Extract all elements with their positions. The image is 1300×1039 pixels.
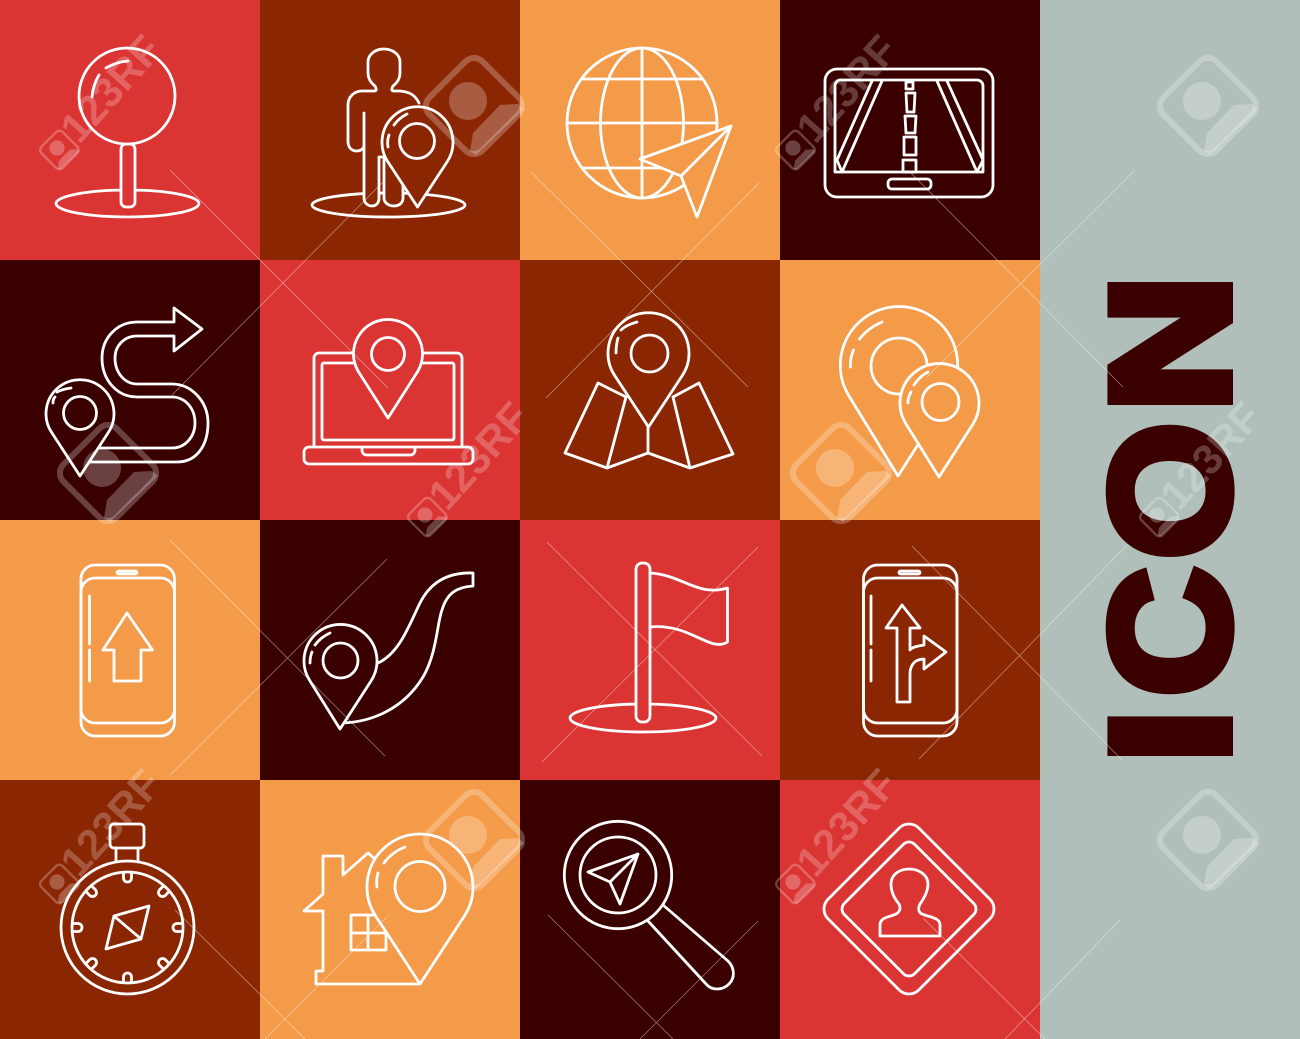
icon: folded map with pin: [565, 313, 733, 468]
icon: laptop with pin: [304, 319, 473, 464]
title: ICON vertical word: N: [1076, 275, 1264, 412]
watermark: 123RF stock marks: 123RF: [787, 26, 906, 151]
icon: two location pins: [840, 307, 979, 477]
title: ICON vertical word: O: [1077, 423, 1264, 559]
icon: map pin on ground: [56, 48, 199, 217]
title: ICON vertical word: C: [1076, 568, 1264, 696]
hairline crosses overlay: [170, 170, 1135, 1039]
icon: winding route with pin: [46, 308, 208, 476]
watermark: 123RF stock marks: 123RF: [51, 760, 170, 885]
title: ICON vertical word: I: [1077, 709, 1264, 763]
icon: GPS navigator with road: [825, 69, 993, 197]
title: ICON vertical word: [1076, 275, 1264, 763]
watermark: 123RF stock marks: 123RF: [787, 760, 906, 885]
icon: globe with paper plane: [567, 48, 731, 217]
icon: smartphone with up arrow: [81, 565, 174, 736]
icon: flag on ground: [570, 563, 728, 732]
watermark: 123RF stock marks: 123RF: [1151, 393, 1270, 518]
icon: compass: [61, 824, 194, 994]
watermark: 123RF stock marks: 123RF: [51, 26, 170, 151]
icon: magnifier with navigation arrow: [564, 821, 733, 989]
icon: curved road with pin: [304, 573, 473, 729]
watermark: 123RF stock marks: 123RF: [419, 393, 538, 518]
icon: smartphone with split arrow: [864, 565, 957, 736]
icon: person with location pin: [312, 49, 465, 217]
icon: house with pin: [304, 834, 473, 984]
icon: road sign with person: [818, 818, 1000, 1000]
